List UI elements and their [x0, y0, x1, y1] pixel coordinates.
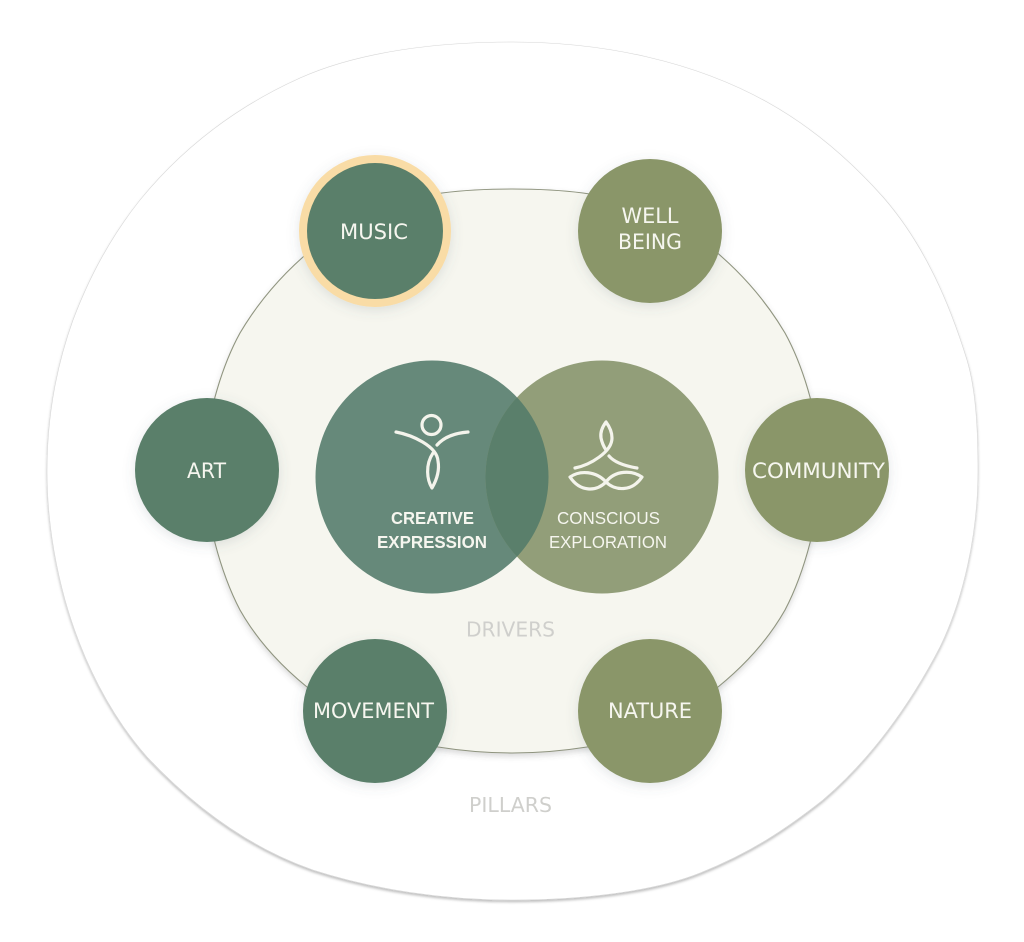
driver: conscious exploration circle — [486, 360, 718, 594]
panel: drivers inner shape — [206, 189, 819, 753]
label: conscious exploration: EXPLORATION — [549, 532, 667, 552]
label: conscious exploration — [549, 508, 667, 552]
label: creative expression: EXPRESSION — [377, 532, 487, 552]
icon: meditating figure — [570, 422, 642, 489]
pillar: movement: MOVEMENT — [313, 699, 435, 724]
label: creative expression — [377, 508, 487, 552]
pillar: nature: NATURE — [608, 699, 692, 724]
pillar: movement — [303, 639, 447, 783]
pillar: community — [745, 398, 889, 542]
pillar: music: MUSIC — [340, 220, 408, 245]
pillar: well being: WELL — [622, 204, 679, 229]
pillar: well being: BEING — [618, 230, 682, 255]
label: conscious exploration: CONSCIOUS — [557, 508, 660, 528]
label: pillars: PILLARS — [469, 793, 552, 817]
label: creative expression: CREATIVE — [391, 508, 474, 528]
label: drivers: DRIVERS — [466, 618, 555, 642]
overlap of driver circles — [486, 398, 548, 556]
icon: creative figure — [396, 416, 468, 488]
pillar: music — [303, 159, 447, 303]
pillar: well being — [578, 159, 722, 303]
driver: creative expression circle — [316, 360, 548, 594]
pillar: art — [135, 398, 279, 542]
pillar: nature — [578, 639, 722, 783]
pillar: community: COMMUNITY — [752, 459, 886, 484]
pillar: art: ART — [187, 459, 227, 484]
